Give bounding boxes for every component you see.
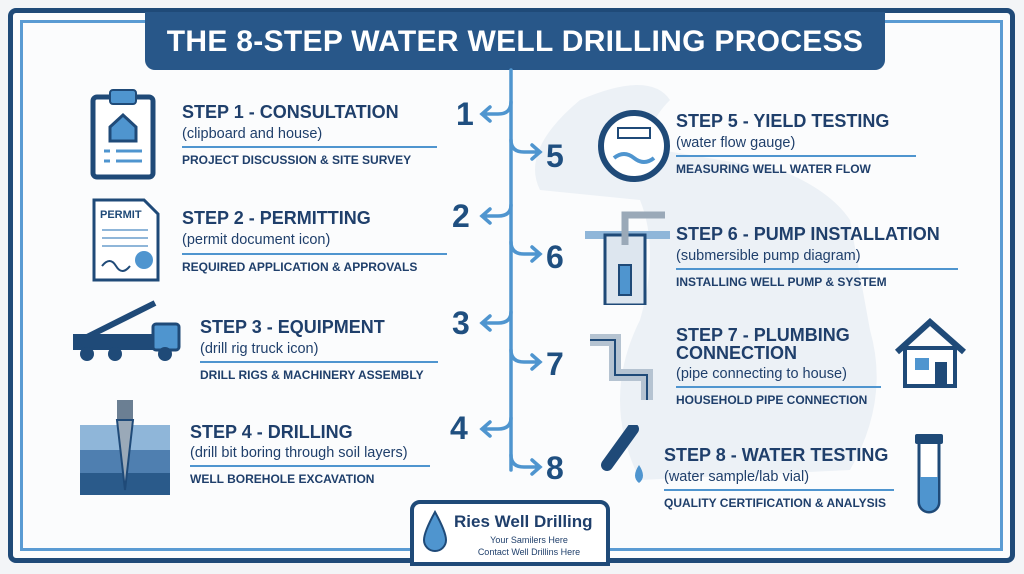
icon: house xyxy=(895,318,966,388)
step 7: CONNECTION xyxy=(676,343,797,363)
text: HOUSEHOLD PIPE CONNECTION xyxy=(676,393,867,407)
icon: flow gauge xyxy=(598,110,670,182)
icon: test tube xyxy=(915,434,943,514)
text: 8 xyxy=(546,450,564,486)
logo box: Ries Well Drilling xyxy=(454,512,593,531)
text: WELL BOREHOLE EXCAVATION xyxy=(190,472,374,486)
text: (water sample/lab vial) xyxy=(664,469,809,485)
text: (water flow gauge) xyxy=(676,135,795,151)
step 7: STEP 7 - PLUMBING xyxy=(676,325,850,345)
step 7 xyxy=(676,325,850,363)
numbers: 1 xyxy=(456,96,474,132)
step 8: STEP 8 - WATER TESTING xyxy=(664,445,888,465)
step 3: STEP 3 - EQUIPMENT xyxy=(200,317,385,337)
icon: permit: PERMIT xyxy=(100,209,142,221)
text: (clipboard and house) xyxy=(182,126,322,142)
text: (drill rig truck icon) xyxy=(200,341,318,357)
text: PROJECT DISCUSSION & SITE SURVEY xyxy=(182,153,411,167)
icon: permit xyxy=(92,198,160,282)
text: REQUIRED APPLICATION & APPROVALS xyxy=(182,260,417,274)
step 1: STEP 1 - CONSULTATION xyxy=(182,102,399,122)
text: INSTALLING WELL PUMP & SYSTEM xyxy=(676,275,887,289)
text: (drill bit boring through soil layers) xyxy=(190,445,408,461)
text: 4 xyxy=(450,410,468,446)
text: 7 xyxy=(546,346,564,382)
background map xyxy=(535,85,876,480)
text: 5 xyxy=(546,138,564,174)
text: MEASURING WELL WATER FLOW xyxy=(676,162,871,176)
icon: vial xyxy=(601,425,643,483)
text: DRILL RIGS & MACHINERY ASSEMBLY xyxy=(200,368,424,382)
text: QUALITY CERTIFICATION & ANALYSIS xyxy=(664,496,886,510)
icon: clipboard xyxy=(90,89,156,180)
step 4: STEP 4 - DRILLING xyxy=(190,422,353,442)
title banner xyxy=(145,12,885,70)
icon: drill truck xyxy=(73,300,180,361)
logo box: Your Samilers Here xyxy=(490,535,568,545)
step 6: STEP 6 - PUMP INSTALLATION xyxy=(676,224,940,244)
text: 3 xyxy=(452,305,470,341)
icon: pipe xyxy=(590,334,653,400)
text: (pipe connecting to house) xyxy=(676,366,847,382)
icon: drop xyxy=(423,510,447,552)
icon: drill soil xyxy=(80,400,170,495)
step 2: STEP 2 - PERMITTING xyxy=(182,208,371,228)
text: 2 xyxy=(452,198,470,234)
logo box: Contact Well Drillins Here xyxy=(478,547,580,557)
step 5: STEP 5 - YIELD TESTING xyxy=(676,111,889,131)
text: 6 xyxy=(546,239,564,275)
text: (submersible pump diagram) xyxy=(676,248,861,264)
logo box xyxy=(410,500,610,566)
title banner: THE 8-STEP WATER WELL DRILLING PROCESS xyxy=(167,25,863,58)
icon: pump xyxy=(585,212,670,305)
text: (permit document icon) xyxy=(182,232,330,248)
